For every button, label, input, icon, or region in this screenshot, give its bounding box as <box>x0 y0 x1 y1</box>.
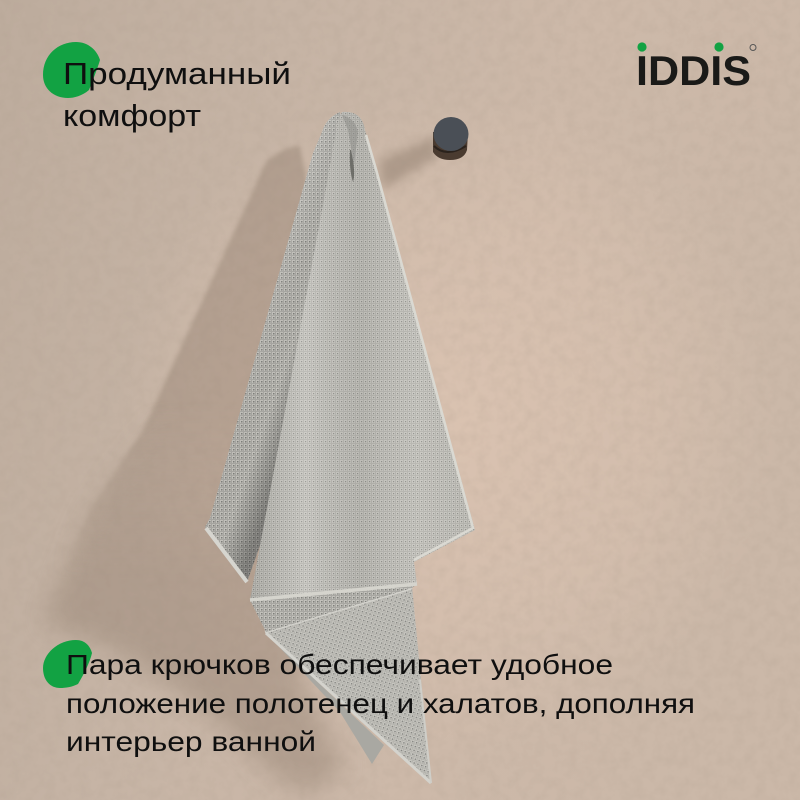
icon: wall hook <box>433 117 468 160</box>
description: Пара крючков обеспечивает удобное <box>66 649 613 680</box>
logo: IDDIS: IDDIS <box>636 47 751 94</box>
heading block: комфорт <box>63 98 201 133</box>
title: Продуманный <box>63 56 291 91</box>
body text block: положение полотенец и халатов, дополняя <box>66 688 695 719</box>
towel: middle fold under front panel <box>250 584 417 632</box>
towel: lower hanging corner <box>265 586 431 783</box>
towel: front panel <box>250 112 475 600</box>
towel <box>205 112 475 783</box>
body text block <box>43 640 695 757</box>
hook shadow on wall <box>380 136 437 190</box>
towel shadow on wall <box>43 146 345 795</box>
green blob behind body text <box>43 640 92 688</box>
green blob behind heading <box>43 42 100 98</box>
body text block: интерьер ванной <box>66 726 316 757</box>
towel: back left fold <box>205 112 345 582</box>
heading block <box>43 42 291 133</box>
